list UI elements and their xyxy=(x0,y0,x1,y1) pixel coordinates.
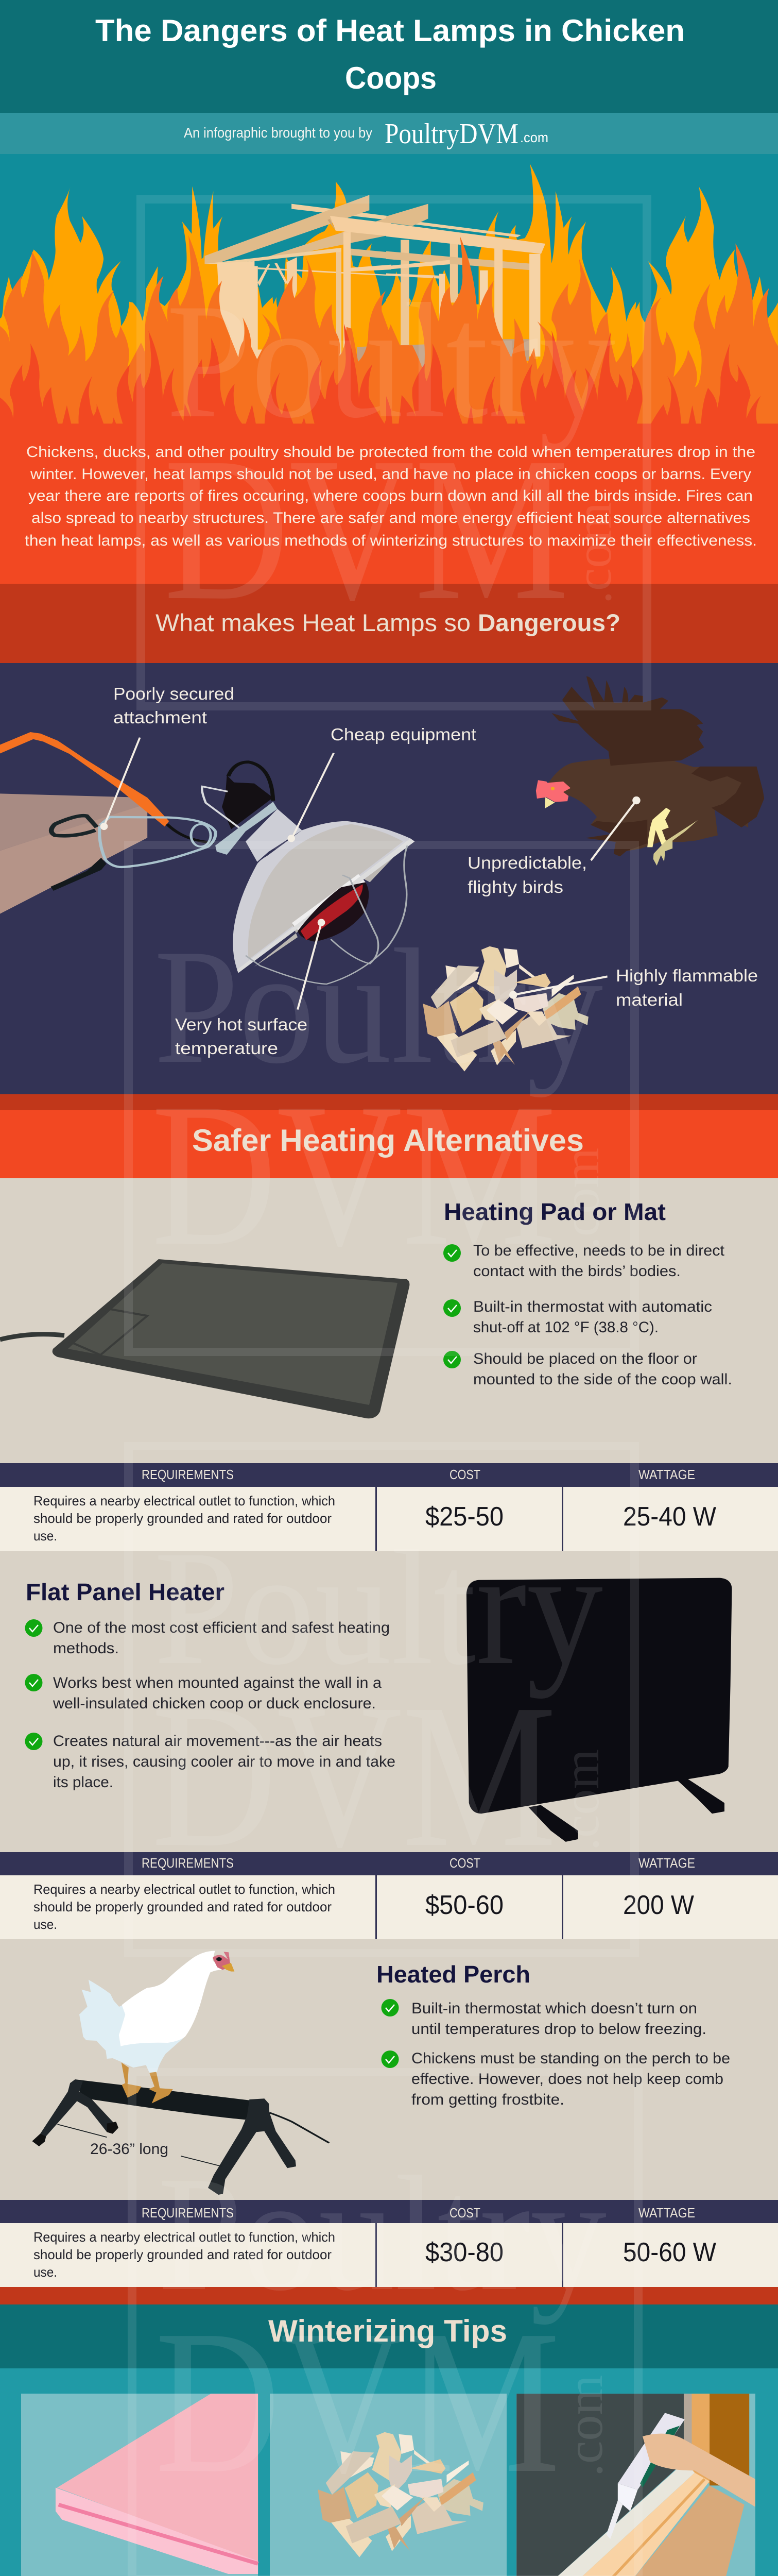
bullet list: shut-off at 102 °F (38.8 °C). xyxy=(473,1319,659,1336)
table: heated perch specs xyxy=(0,2200,778,2287)
illustration: heat lamp xyxy=(202,762,414,984)
table: heating pad specs: REQUIREMENTS xyxy=(142,1467,234,1482)
illustration: flighty hen xyxy=(536,676,764,866)
panel: flat panel heater xyxy=(25,1578,732,1842)
table: heating pad specs: WATTAGE xyxy=(638,1467,695,1482)
heading: what makes heat lamps dangerous: Dangerous? xyxy=(478,609,620,636)
illustration: hen on perch xyxy=(32,1951,329,2195)
watermark 1: Poultry xyxy=(166,270,615,452)
illustration: wooden beam xyxy=(0,793,147,914)
table: heated perch specs: WATTAGE xyxy=(638,2205,695,2221)
bullet list xyxy=(25,1619,395,1791)
table: flat panel specs: Requires a nearby electrical outlet to function, which xyxy=(33,1882,335,1897)
bullet list: Built-in thermostat with automatic xyxy=(473,1298,712,1315)
bullet list: contact with the birds’ bodies. xyxy=(473,1263,681,1280)
table: flat panel specs xyxy=(0,1852,778,1939)
bullet list: up, it rises, causing cooler air to move in and take xyxy=(53,1753,395,1770)
heading: what makes heat lamps dangerous xyxy=(0,584,778,663)
heading: winterizing tips: Winterizing Tips xyxy=(268,2314,507,2348)
table: flat panel specs: should be properly grounded and rated for outdoor xyxy=(33,1899,332,1914)
panel: brought-to-you band xyxy=(0,113,778,154)
table: heating pad specs: 25-40 W xyxy=(623,1502,716,1532)
intro text: winter. However, heat lamps should not be used, and have no place in chicken coops or barns. Every xyxy=(30,466,751,483)
danger labels: temperature xyxy=(175,1039,278,1058)
product name: Flat Panel Heater xyxy=(26,1579,224,1605)
table: heated perch specs: Requires a nearby electrical outlet to function, which xyxy=(33,2229,335,2245)
bullet list: effective. However, does not help keep comb xyxy=(411,2071,723,2088)
table: flat panel specs: COST xyxy=(449,1855,480,1871)
bullet list: until temperatures drop to below freezing. xyxy=(411,2021,706,2038)
panel: winterizing tips xyxy=(0,2368,778,2576)
danger labels: Unpredictable, xyxy=(468,853,587,872)
product name: Heated Perch xyxy=(376,1961,530,1988)
watermark 3: .com xyxy=(552,1749,610,1851)
table: flat panel specs: $50-60 xyxy=(425,1890,504,1920)
panel: introduction xyxy=(0,424,778,584)
danger labels: Highly flammable xyxy=(616,966,758,985)
length label: 26-36” long xyxy=(90,2141,168,2158)
illustration: heating pad xyxy=(0,1259,409,1418)
bullet list: Chickens must be standing on the perch to be xyxy=(411,2050,730,2067)
bullet list: methods. xyxy=(53,1640,119,1657)
table: heated perch specs: use. xyxy=(33,2264,57,2280)
bullet list: Built-in thermostat which doesn’t turn on xyxy=(411,2000,697,2017)
danger labels xyxy=(113,684,758,1058)
intro text: year there are reports of fires occuring, where coops burn down and kill all the birds inside. Fires can xyxy=(28,487,753,504)
intro text: then heat lamps, as well as various methods of winterizing structures to maximize their effectiveness. xyxy=(25,532,757,549)
bullet list: its place. xyxy=(53,1774,113,1791)
illustration: power cord xyxy=(0,732,169,826)
bullet list: Creates natural air movement---as the air heats xyxy=(53,1733,382,1750)
title xyxy=(95,13,685,95)
danger labels: Cheap equipment xyxy=(331,725,476,744)
table: heated perch specs: COST xyxy=(449,2205,480,2221)
table: flat panel specs: WATTAGE xyxy=(638,1855,695,1871)
watermark 3: Poultry xyxy=(154,1517,603,1699)
heading: safer heating alternatives xyxy=(0,1094,778,1178)
tip card: insulate xyxy=(21,2394,258,2576)
heading: winterizing tips xyxy=(0,2287,778,2368)
title: The Dangers of Heat Lamps in Chicken xyxy=(95,13,685,48)
bullet list: Works best when mounted against the wall in a xyxy=(53,1674,382,1691)
panel: title header xyxy=(0,0,778,113)
logo: PoultryDVM.com: .com xyxy=(520,130,548,145)
bullet list: from getting frostbite. xyxy=(411,2091,564,2108)
watermark 3 xyxy=(124,1442,639,1957)
coop frame xyxy=(204,195,545,370)
table: heating pad specs: Requires a nearby electrical outlet to function, which xyxy=(33,1493,335,1509)
danger labels: Poorly secured xyxy=(113,684,234,703)
table: heated perch specs: should be properly grounded and rated for outdoor xyxy=(33,2247,332,2262)
middle flames xyxy=(0,235,778,428)
watermark 4 xyxy=(128,2068,643,2576)
watermark 2: .com xyxy=(552,1148,610,1249)
table: heating pad specs: should be properly grounded and rated for outdoor xyxy=(33,1511,332,1526)
illustration: clamp xyxy=(50,816,215,891)
bullet list: well-insulated chicken coop or duck enclosure. xyxy=(53,1695,376,1712)
bullet list: To be effective, needs to be in direct xyxy=(473,1242,725,1259)
illustration: flat panel heater xyxy=(466,1578,732,1842)
panel: heated perch xyxy=(32,1951,730,2195)
title: Coops xyxy=(345,61,437,95)
table: flat panel specs: use. xyxy=(33,1917,57,1932)
watermark 1 xyxy=(136,195,651,710)
table: flat panel specs: 200 W xyxy=(623,1890,694,1920)
danger labels: flighty birds xyxy=(468,877,563,896)
panel: heat lamp dangers xyxy=(0,663,778,1094)
logo: PoultryDVM.com: PoultryDVM xyxy=(385,118,518,150)
tip card: seal drafts xyxy=(516,2394,755,2576)
table: heating pad specs xyxy=(0,1463,778,1551)
watermark 4: Poultry xyxy=(158,2143,607,2325)
watermark 3: DVM xyxy=(151,1662,557,1890)
panel: burning coop scene xyxy=(0,154,778,428)
tip card: bedding xyxy=(270,2394,507,2576)
danger labels: material xyxy=(616,990,683,1009)
watermark 1: DVM xyxy=(164,415,569,643)
watermark 2: DVM xyxy=(151,1060,557,1289)
back flames xyxy=(0,164,778,428)
table: heated perch specs: $30-80 xyxy=(425,2238,504,2267)
intro text: Chickens, ducks, and other poultry should be protected from the cold when temperatures drop in the xyxy=(26,444,755,461)
leader line: shavings xyxy=(509,976,608,999)
intro text xyxy=(25,444,757,549)
panel: heating pad or mat xyxy=(0,1198,732,1418)
watermark 2 xyxy=(124,841,639,1356)
table: heating pad specs: use. xyxy=(33,1528,57,1544)
bullet list: mounted to the side of the coop wall. xyxy=(473,1371,732,1388)
table: heating pad specs: COST xyxy=(449,1467,480,1482)
leader lines: attachment, equipment, surface xyxy=(100,738,334,1009)
front flames xyxy=(0,324,778,428)
bullet list: One of the most cost efficient and safest heating xyxy=(53,1619,390,1636)
heading: what makes heat lamps dangerous: What makes Heat Lamps so xyxy=(155,609,471,636)
bullet list xyxy=(381,1999,730,2108)
table: flat panel specs: REQUIREMENTS xyxy=(142,1855,234,1871)
panel: heating alternatives background xyxy=(0,1178,778,2201)
leader line: birds xyxy=(591,796,641,860)
heading: safer heating alternatives: Safer Heating Alternatives xyxy=(192,1123,584,1158)
illustration: pine shavings xyxy=(423,946,589,1072)
danger labels: Very hot surface xyxy=(175,1015,307,1034)
table: heating pad specs: $25-50 xyxy=(425,1502,504,1532)
panel: brought-to-you band: An infographic brought to you by xyxy=(184,125,372,141)
danger labels: attachment xyxy=(113,708,207,727)
bullet list xyxy=(443,1242,732,1388)
watermark 1: .com xyxy=(565,502,622,604)
table: heated perch specs: REQUIREMENTS xyxy=(142,2205,234,2221)
intro text: also spread to nearby structures. There are safer and more energy efficient heat source alternatives xyxy=(31,510,750,527)
bullet list: Should be placed on the floor or xyxy=(473,1350,697,1367)
watermark 2: Poultry xyxy=(154,916,603,1098)
watermark 4: .com xyxy=(556,2375,613,2477)
watermark 4: DVM xyxy=(155,2287,560,2516)
table: heated perch specs: 50-60 W xyxy=(623,2238,716,2267)
product name: Heating Pad or Mat xyxy=(444,1198,666,1225)
